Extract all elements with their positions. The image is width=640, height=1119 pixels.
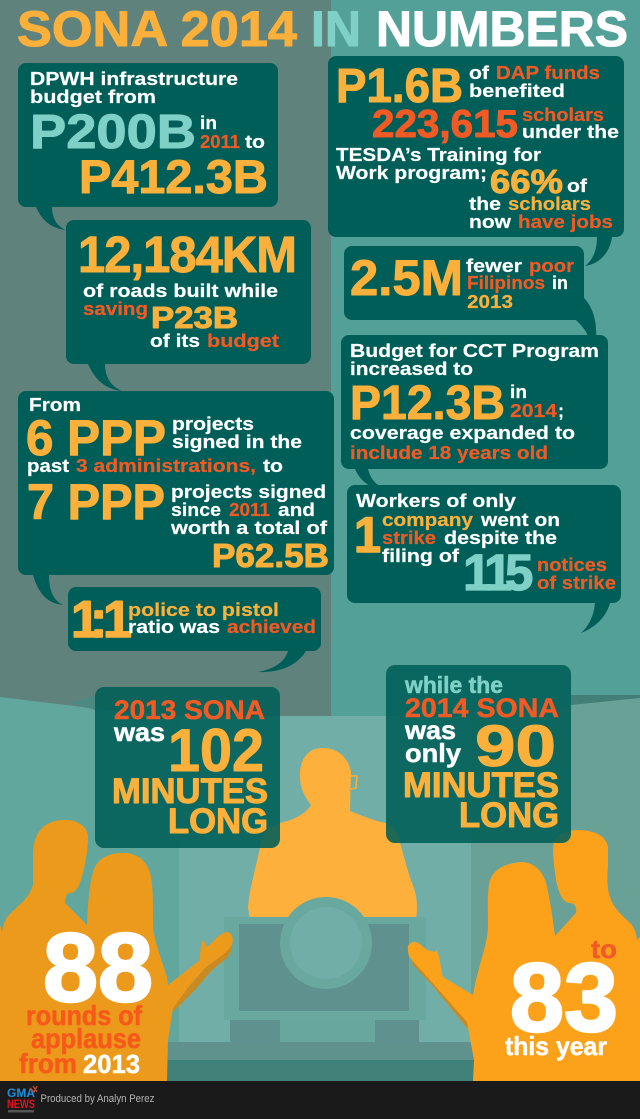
- panel: CCT program: coverage expanded to: [350, 423, 575, 443]
- panel: fewer poor Filipinos: Filipinos: [467, 273, 545, 293]
- panel: 2014 SONA length: 90: [475, 714, 556, 779]
- stat: 88 rounds of applause: 88: [43, 913, 153, 1022]
- panel: DAP funds: [328, 56, 624, 266]
- panel: PPP projects: 2011: [229, 500, 270, 520]
- panel: DAP funds: P1.6B: [336, 60, 463, 113]
- panel: roads built: [66, 220, 311, 391]
- panel: CCT program: in: [510, 382, 527, 402]
- panel: DAP funds: under the: [522, 122, 619, 142]
- panel: strike notices: Workers of only: [356, 491, 516, 511]
- panel: strike notices: of strike: [537, 573, 616, 593]
- panel: roads built: of its: [150, 331, 200, 351]
- panel: 2014 SONA length: MINUTES: [403, 766, 559, 805]
- panel: 2014 SONA length: [386, 665, 571, 843]
- panel: DPWH budget: budget from: [30, 87, 156, 107]
- panel: roads built: budget: [207, 331, 279, 351]
- panel: CCT program: P12.3B: [350, 377, 505, 430]
- panel: DPWH budget: DPWH infrastructure: [30, 69, 238, 89]
- panel: strike notices: 115: [463, 544, 533, 601]
- left audience silhouettes: [0, 820, 233, 1081]
- panel: CCT program: [341, 335, 608, 486]
- panel: PPP projects: signed in the: [172, 432, 302, 452]
- stat: 88 rounds of applause: [19, 913, 153, 1079]
- panel: CCT program: 2014: [510, 401, 557, 421]
- panel: strike notices: filing of: [382, 546, 460, 566]
- panel: PPP projects: worth a total of: [170, 518, 328, 538]
- panel: police to pistol: police to pistol: [128, 600, 279, 620]
- stat: 88 rounds of applause: applause: [31, 1023, 141, 1054]
- panel: PPP projects: 6 PPP: [26, 410, 166, 466]
- panel: PPP projects: 3 administrations,: [76, 456, 256, 476]
- panel: police to pistol: 1:1: [71, 591, 132, 649]
- panel: DAP funds: scholars: [522, 105, 604, 125]
- panel: fewer poor Filipinos: [344, 246, 596, 336]
- panel: CCT program: include 18 years old: [350, 443, 548, 463]
- panel: DAP funds: TESDA’s Training for: [336, 145, 541, 165]
- panel: PPP projects: From: [29, 395, 81, 415]
- panel: strike notices: notices: [537, 555, 607, 575]
- panel: fewer poor Filipinos: poor: [529, 256, 574, 276]
- panel: PPP projects: since: [171, 500, 221, 520]
- podium: [224, 897, 426, 1042]
- panel: roads built: saving: [83, 299, 148, 319]
- panel: DPWH budget: in: [200, 113, 217, 133]
- title: [17, 1, 628, 57]
- panel: 2013 SONA length: 102: [168, 717, 264, 784]
- stat: 88 rounds of applause: from: [19, 1048, 77, 1079]
- GMA News logo: NEWS: [7, 1099, 35, 1111]
- GMA News logo: [7, 1086, 37, 1112]
- stat: to 83 this year: 83: [510, 943, 618, 1052]
- panel: 2014 SONA length: only: [405, 738, 462, 768]
- panel: DAP funds: DAP funds: [496, 63, 600, 83]
- panel: DAP funds: benefited: [469, 81, 565, 101]
- panel: strike notices: strike: [382, 528, 436, 548]
- panel: roads built: 12,184KM: [78, 226, 296, 283]
- panel: PPP projects: and: [278, 500, 315, 520]
- floor: [0, 1042, 640, 1081]
- panel: fewer poor Filipinos: 2.5M: [350, 250, 463, 306]
- footer bar: [0, 1081, 640, 1119]
- right audience silhouettes: [408, 830, 640, 1081]
- panel: roads built: of roads built while: [83, 281, 278, 301]
- panel: strike notices: despite the: [444, 528, 557, 548]
- panel: strike notices: went on: [480, 510, 560, 530]
- panel: strike notices: company: [382, 510, 473, 530]
- panel: PPP projects: to: [263, 456, 283, 476]
- panel: CCT program: ;: [558, 401, 564, 421]
- panel: DAP funds: Work program;: [336, 163, 487, 183]
- panel: police to pistol: achieved: [227, 617, 316, 637]
- panel: DAP funds: have jobs: [518, 212, 613, 232]
- panel: fewer poor Filipinos: fewer: [466, 256, 522, 276]
- panel: 2013 SONA length: 2013 SONA: [114, 695, 265, 725]
- title: NUMBERS: [376, 1, 628, 57]
- panel: police to pistol: ratio was: [128, 617, 220, 637]
- panel: DPWH budget: [18, 63, 278, 230]
- panel: PPP projects: P62.5B: [212, 537, 329, 574]
- panel: 2013 SONA length: MINUTES: [112, 772, 268, 811]
- stat: to 83 this year: to: [591, 934, 617, 964]
- panel: DAP funds: 66%: [490, 163, 563, 200]
- panel: PPP projects: projects signed: [171, 482, 326, 502]
- panel: DAP funds: 223,615: [372, 103, 518, 146]
- panel: DAP funds: the: [469, 194, 501, 214]
- panel: DAP funds: scholars: [508, 194, 591, 214]
- panel: DPWH budget: P412.3B: [79, 150, 268, 203]
- panel: 2013 SONA length: [95, 687, 280, 848]
- panel: 2014 SONA length: 2014 SONA: [405, 693, 559, 723]
- panel: fewer poor Filipinos: in: [552, 273, 568, 293]
- panel: 2014 SONA length: was: [404, 715, 456, 745]
- panel: DPWH budget: 2011: [200, 132, 240, 152]
- panel: CCT program: increased to: [350, 359, 473, 379]
- panel: 2013 SONA length: was: [113, 717, 165, 747]
- panel: PPP projects: projects: [172, 414, 254, 434]
- panel: 2014 SONA length: while the: [404, 672, 503, 698]
- panel: 2014 SONA length: LONG: [459, 796, 559, 835]
- panel: PPP projects: past: [27, 456, 69, 476]
- GMA News logo: GMA: [7, 1088, 35, 1100]
- panel: DAP funds: of: [567, 176, 588, 196]
- title: SONA 2014: [17, 1, 297, 57]
- panel: strike notices: [347, 485, 621, 633]
- title: IN: [311, 1, 361, 57]
- panel: DAP funds: of: [469, 63, 490, 83]
- credit text: Produced by Analyn Perez: [40, 1093, 154, 1105]
- panel: strike notices: 1: [354, 507, 381, 563]
- panel: DAP funds: now: [469, 212, 512, 232]
- speaker silhouette: [248, 748, 417, 920]
- panel: CCT program: Budget for CCT Program: [350, 341, 599, 361]
- stat: 88 rounds of applause: 2013: [83, 1049, 140, 1079]
- panel: PPP projects: [18, 391, 334, 605]
- panel: DPWH budget: P200B: [30, 106, 196, 159]
- stat: 88 rounds of applause: rounds of: [26, 1000, 143, 1031]
- panel: fewer poor Filipinos: 2013: [467, 292, 513, 312]
- panel: DPWH budget: to: [245, 132, 265, 152]
- panel: roads built: P23B: [151, 300, 238, 335]
- panel: police to pistol: [68, 587, 321, 672]
- panel: PPP projects: 7 PPP: [27, 474, 165, 530]
- panel: 2013 SONA length: LONG: [168, 802, 268, 841]
- stat: to 83 this year: this year: [505, 1031, 607, 1061]
